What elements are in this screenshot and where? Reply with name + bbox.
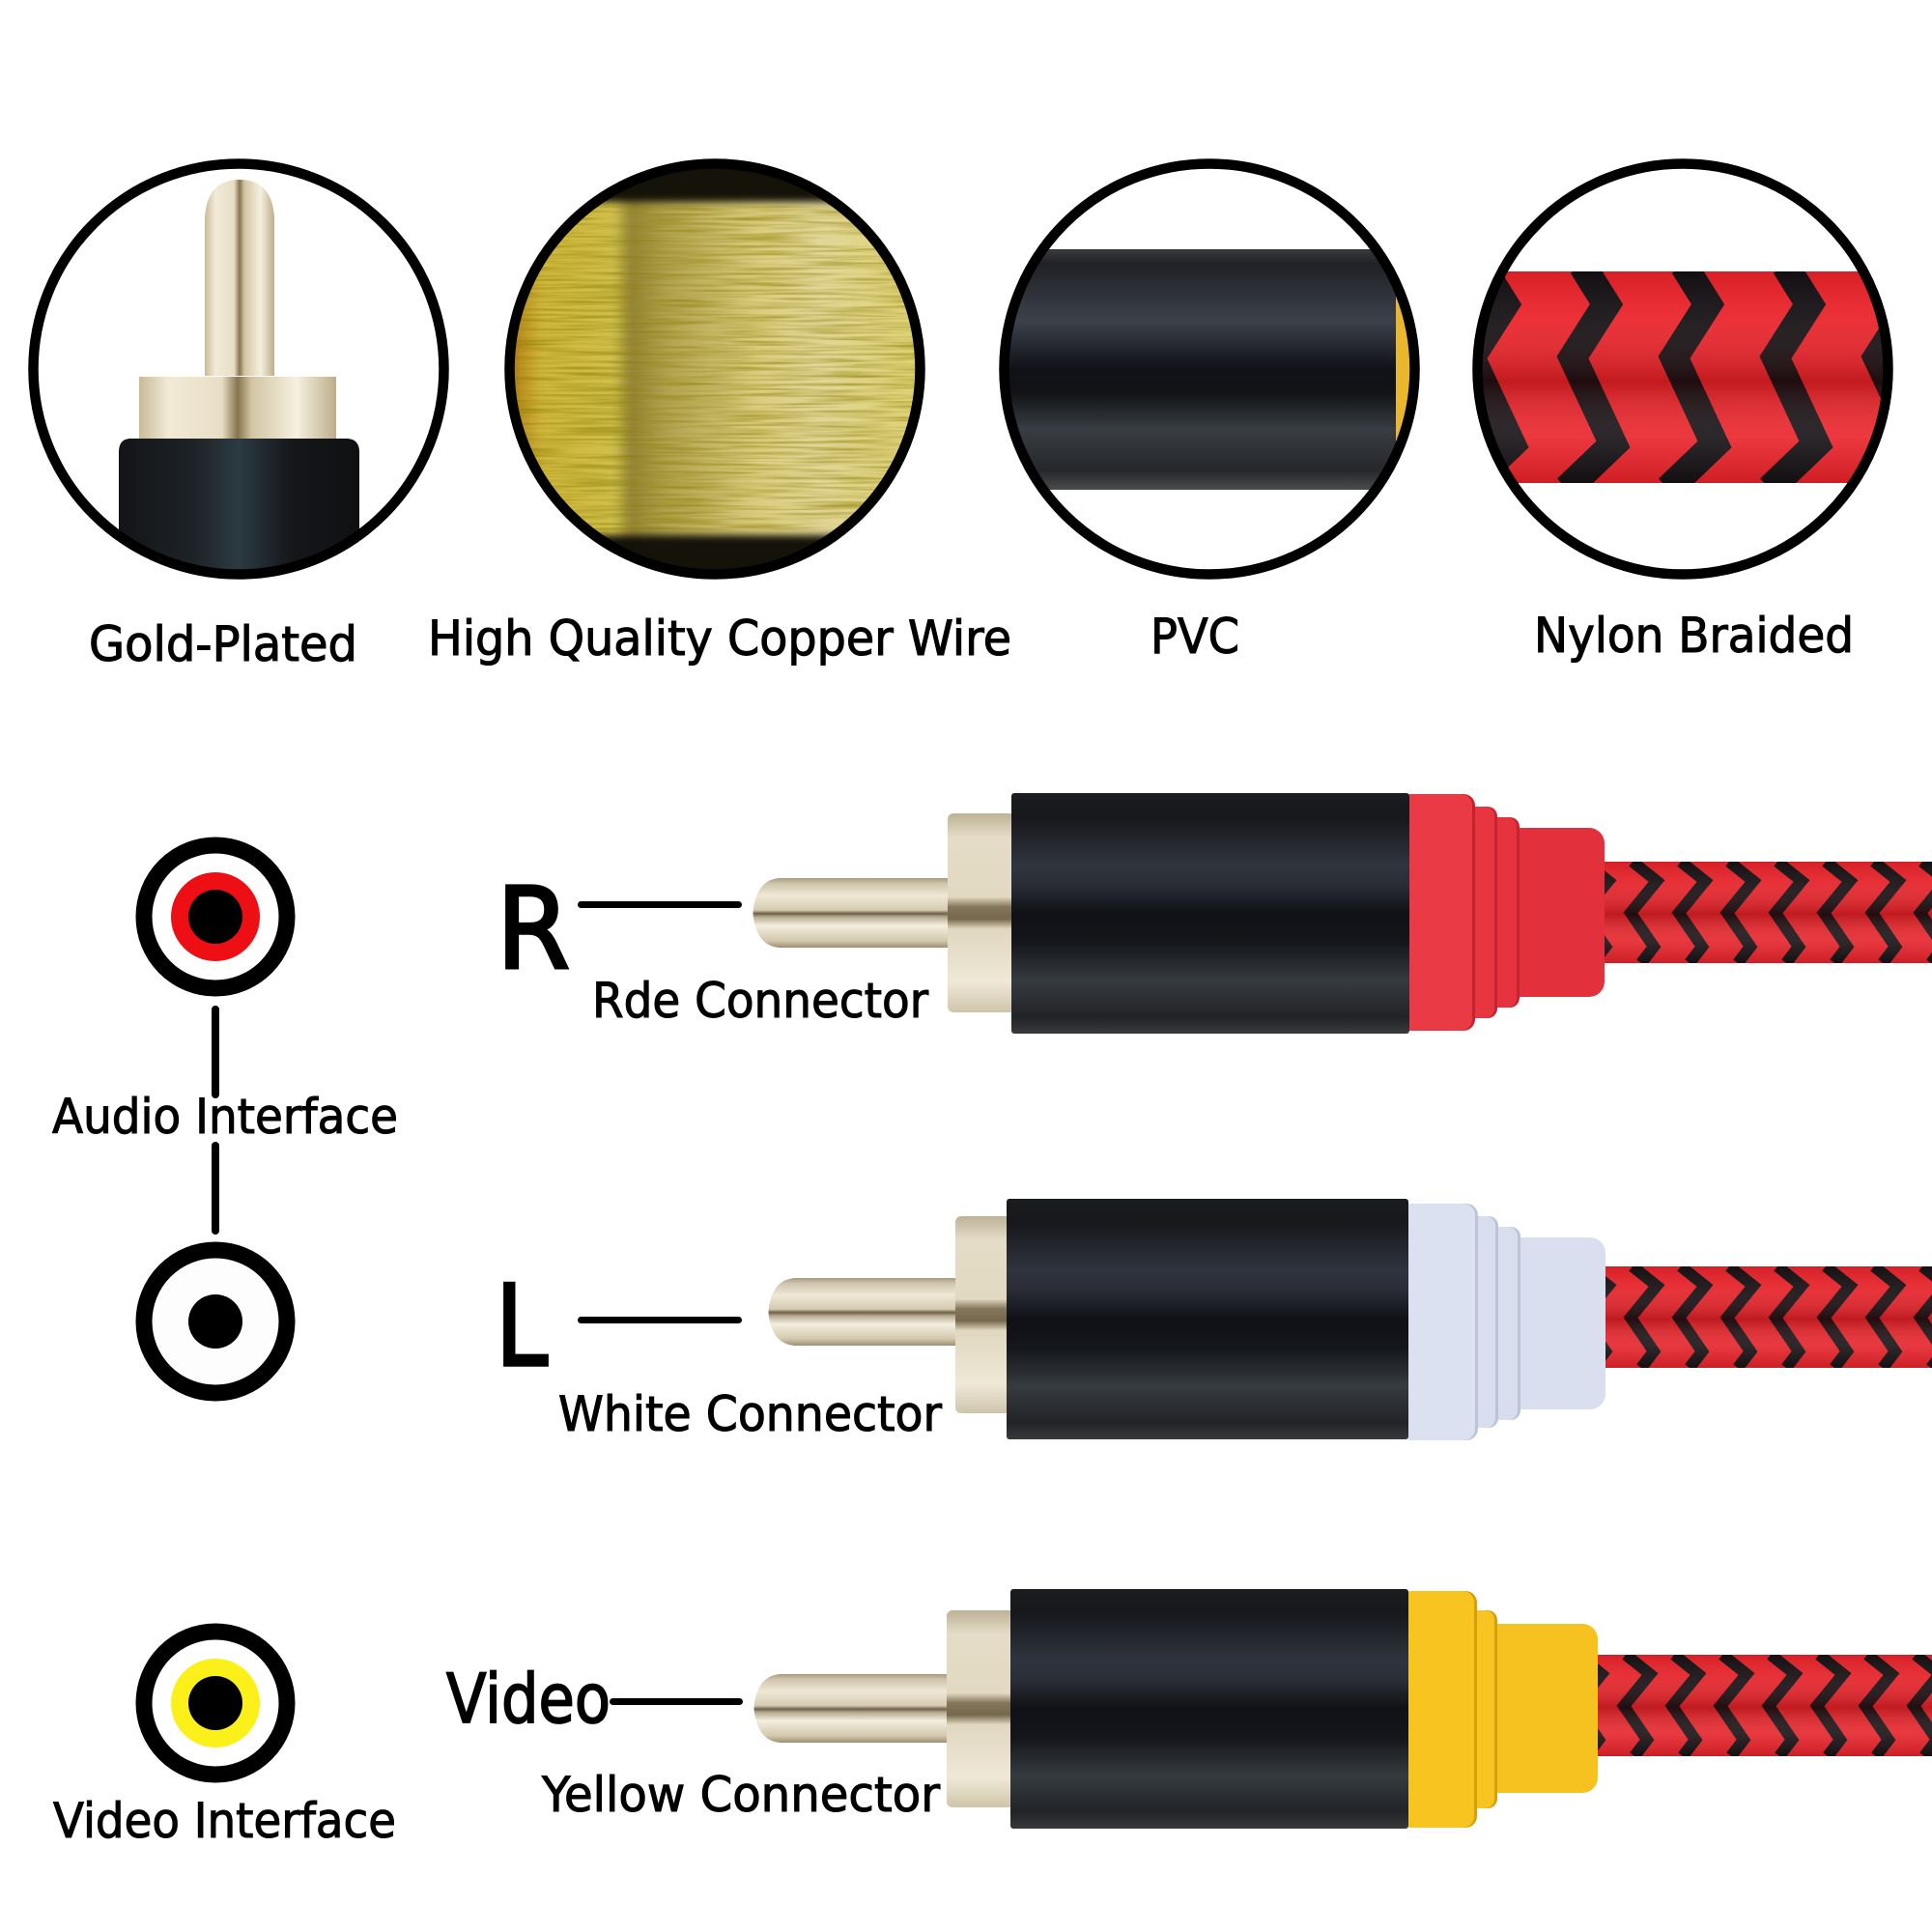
black body (1011, 793, 1409, 1034)
leader line: L (578, 1317, 742, 1323)
connector line: lower (212, 1142, 219, 1235)
white sleeve (1401, 1204, 1605, 1440)
pin (753, 878, 948, 948)
yellow sleeve (1401, 1591, 1598, 1828)
connector: red (753, 793, 1932, 1034)
label: Rde Connector: Rde Connector (592, 973, 928, 1029)
black PVC body (995, 249, 1396, 490)
label: White Connector: White Connector (558, 1386, 942, 1442)
icon: white audio jack (144, 1250, 287, 1393)
collar (947, 1610, 1014, 1807)
panel: gold-plated detail (33, 164, 444, 599)
connector: white (769, 1199, 1932, 1440)
connector: yellow (753, 1589, 1932, 1829)
word: Video: Video (446, 1660, 611, 1739)
icon: gold collar (139, 377, 336, 442)
black body (1007, 1199, 1408, 1439)
braid texture (1472, 271, 1897, 483)
heading: Gold-Plated: Gold-Plated (89, 616, 357, 672)
connector line: upper (212, 1006, 219, 1098)
heading: High Quality Copper Wire: High Quality Copper Wire (428, 611, 1011, 667)
gold wire texture (514, 168, 916, 570)
panel: PVC detail (995, 164, 1430, 574)
black body (1010, 1589, 1408, 1829)
red sleeve (1401, 794, 1605, 1031)
label: Audio Interface: Audio Interface (52, 1089, 398, 1145)
yellow sleeve sliver (1396, 296, 1410, 442)
cable braid (1599, 862, 1932, 963)
panel: copper wire detail (504, 155, 925, 584)
panel: nylon braid detail (1472, 164, 1897, 574)
collar (955, 1216, 1011, 1413)
heading: PVC: PVC (1151, 609, 1239, 665)
icon: black plug body (119, 439, 359, 570)
pin (769, 1278, 955, 1346)
label: Video Interface: Video Interface (53, 1793, 396, 1849)
heading: Nylon Braided: Nylon Braided (1534, 608, 1854, 664)
cable braid (1599, 1266, 1932, 1368)
label: Yellow Connector: Yellow Connector (541, 1767, 940, 1823)
collar (948, 813, 1015, 1012)
letter: R: R (497, 865, 570, 995)
icon: gold pin (205, 180, 274, 376)
icon: red audio jack (144, 845, 287, 988)
pin (753, 1674, 948, 1743)
leader line: R (578, 901, 742, 908)
cable braid (1592, 1655, 1932, 1756)
letter: L: L (496, 1262, 548, 1392)
leader line: Video (610, 1698, 743, 1705)
icon: yellow video jack (144, 1632, 287, 1775)
